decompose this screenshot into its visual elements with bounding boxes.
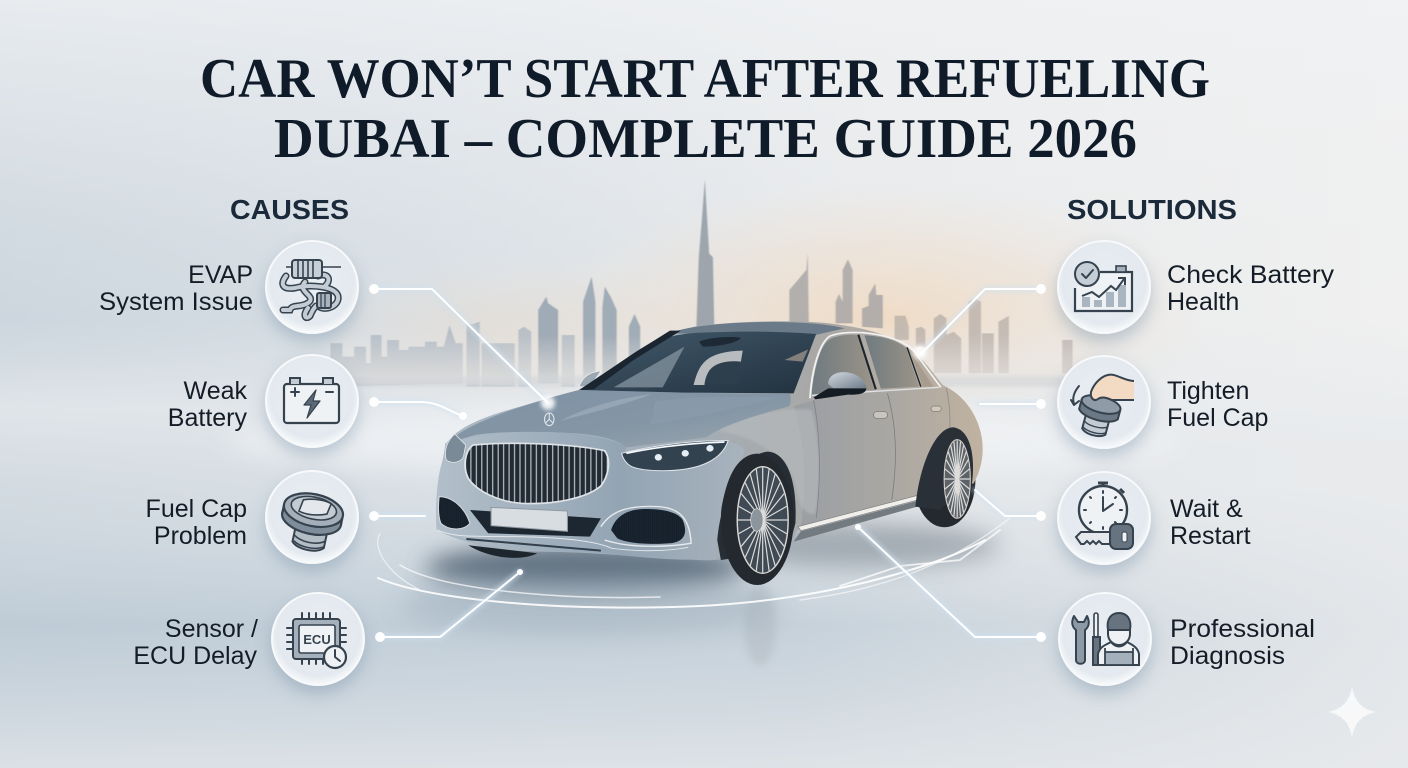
icon: battery xyxy=(284,378,339,423)
label: Fuel Cap Problem: Fuel Cap xyxy=(146,495,247,523)
label: Weak Battery: Weak xyxy=(184,377,247,405)
car body xyxy=(436,321,983,560)
highlight on body xyxy=(717,409,819,514)
windshield xyxy=(581,332,816,393)
label: Tighten Fuel Cap: Fuel Cap xyxy=(1167,404,1268,432)
label: Weak Battery xyxy=(168,377,247,432)
label: Check Battery Health xyxy=(1167,261,1335,316)
icon: ECU chip xyxy=(287,613,346,668)
label: Tighten Fuel Cap xyxy=(1167,377,1268,432)
Burj Khalifa xyxy=(696,179,714,328)
label: Professional Diagnosis: Diagnosis xyxy=(1170,642,1285,670)
label: Tighten Fuel Cap: Tighten xyxy=(1167,377,1249,405)
label: Sensor / ECU Delay: ECU Delay xyxy=(133,642,257,670)
headlight xyxy=(622,441,728,471)
title: CAR WON’T START AFTER REFUELING xyxy=(200,48,1210,110)
floor light rings xyxy=(378,518,1010,608)
connector lines xyxy=(369,284,1046,642)
rear wheel arch xyxy=(915,427,973,510)
label: Wait & Restart: Restart xyxy=(1170,522,1251,550)
front tyre xyxy=(721,454,794,585)
left mirror xyxy=(579,371,601,387)
lower black band xyxy=(470,510,601,537)
left headlight xyxy=(445,434,466,462)
front fascia xyxy=(436,432,744,560)
right mirror xyxy=(814,372,866,399)
cause: sensor / ECU delay xyxy=(133,593,364,685)
side windows xyxy=(812,335,874,395)
label: Check Battery Health: Check Battery xyxy=(1167,261,1335,289)
panel: causes xyxy=(99,241,364,685)
rear tyre xyxy=(914,433,975,527)
front wheel arch xyxy=(717,452,796,560)
lower chrome lip xyxy=(437,530,688,551)
label: EVAP System Issue: System Issue xyxy=(99,288,253,316)
title: DUBAI – COMPLETE GUIDE 2026 xyxy=(274,108,1137,170)
mercedes star xyxy=(545,413,554,426)
solution: tighten fuel cap xyxy=(1058,356,1268,448)
water horizon xyxy=(350,376,1090,387)
label: Professional Diagnosis xyxy=(1170,615,1315,670)
right intake xyxy=(611,509,685,544)
cause: EVAP system issue xyxy=(99,241,358,333)
title xyxy=(200,48,1210,170)
left lower intake xyxy=(438,497,470,529)
car xyxy=(436,321,983,585)
label: EVAP System Issue xyxy=(99,261,253,316)
label: Wait & Restart xyxy=(1170,495,1251,550)
door lines and handles xyxy=(887,393,895,500)
roof xyxy=(670,322,845,335)
label: Wait & Restart: Wait & xyxy=(1170,495,1243,523)
icon: stopwatch and key xyxy=(1076,483,1133,549)
sill chrome xyxy=(798,492,933,531)
label: Fuel Cap Problem xyxy=(146,495,247,550)
icon: ECU chip: ECU xyxy=(303,632,331,647)
front wheel rim xyxy=(737,467,788,573)
label: Sensor / ECU Delay xyxy=(133,615,258,670)
heading: solutions: SOLUTIONS xyxy=(1067,194,1237,225)
heading: causes: CAUSES xyxy=(230,194,349,225)
icon: sparkle watermark xyxy=(1328,687,1376,737)
car shadow and reflection xyxy=(400,523,1000,665)
rear wheel rim xyxy=(944,440,970,518)
skyline: Dubai city xyxy=(331,179,1073,387)
ground light band xyxy=(224,404,1184,476)
icon: EVAP pipes xyxy=(283,260,341,318)
cause: fuel cap problem xyxy=(146,471,358,563)
label: Fuel Cap Problem: Problem xyxy=(154,522,247,550)
solution: professional diagnosis xyxy=(1059,593,1315,685)
label: Professional Diagnosis: Professional xyxy=(1170,615,1315,643)
panel: solutions xyxy=(1058,241,1335,685)
grille xyxy=(465,443,608,504)
icon: fuel cap xyxy=(276,488,346,556)
A pillar dark xyxy=(579,331,681,390)
icon: mechanic with tools xyxy=(1072,613,1139,665)
hood xyxy=(446,390,791,447)
label: EVAP System Issue: EVAP xyxy=(188,261,253,289)
label: Check Battery Health: Health xyxy=(1167,288,1239,316)
door panels xyxy=(794,387,983,528)
skyline haze xyxy=(330,335,1100,385)
front underside xyxy=(468,545,537,558)
number plate xyxy=(491,507,567,531)
icon: hand tightening cap xyxy=(1071,375,1134,440)
cause: weak battery xyxy=(168,355,358,447)
label: Sensor / ECU Delay: Sensor / xyxy=(165,615,258,643)
icon: battery health chart xyxy=(1075,262,1132,311)
solution: wait and restart xyxy=(1058,472,1251,564)
solution: check battery health xyxy=(1058,241,1335,333)
label: Weak Battery: Battery xyxy=(168,404,247,432)
